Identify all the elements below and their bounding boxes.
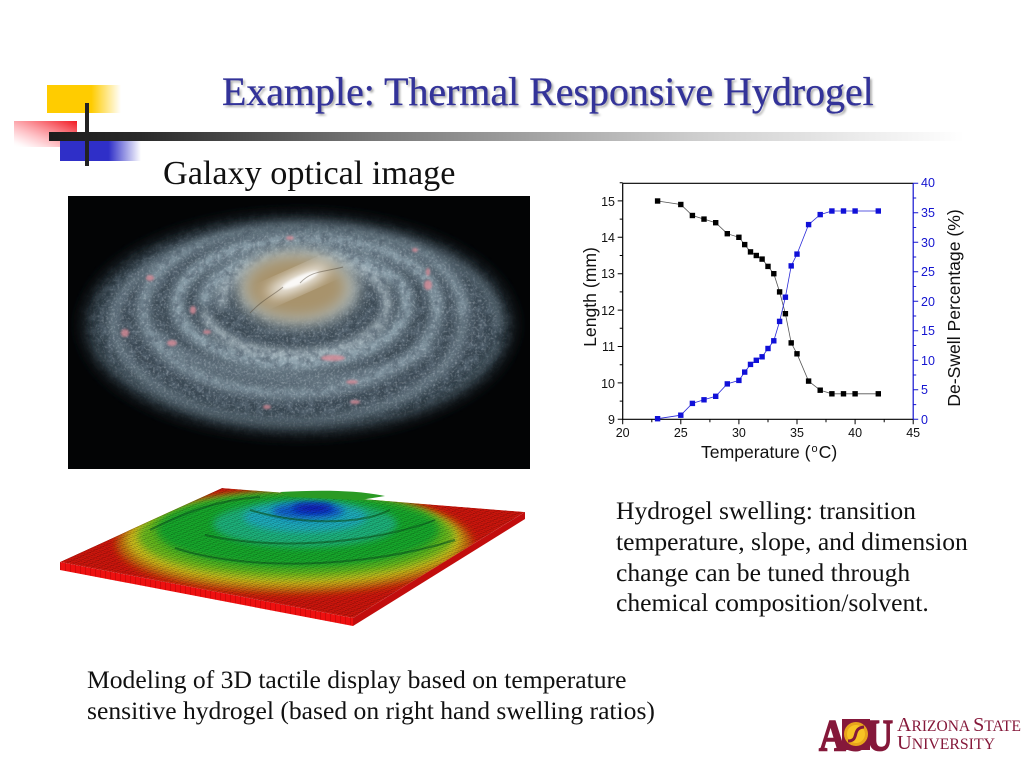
left tick labels: 11: [602, 340, 615, 354]
left tick labels: 13: [601, 267, 615, 281]
left tick labels: 14: [601, 231, 615, 245]
left tick labels: 10: [601, 377, 615, 391]
right tick labels: 0: [921, 413, 928, 427]
right tick labels: 15: [921, 324, 935, 338]
3D mesh model of tactile display: [60, 488, 525, 626]
bottom tick labels: 30: [732, 426, 746, 440]
x axis label: temperature: Temperature (: [701, 442, 811, 462]
right tick labels: [921, 176, 935, 427]
right tick labels: 35: [921, 206, 935, 220]
left tick labels: 15: [601, 195, 615, 209]
text: modeling caption: Modeling of 3D tactile display based on temperature: [87, 665, 626, 694]
heading: galaxy optical image: Galaxy optical image: [163, 155, 455, 192]
y axis label: length: Length (mm): [580, 247, 600, 347]
bottom tick labels: 35: [790, 426, 804, 440]
x axis label: temperature: C): [819, 442, 837, 462]
text: hydrogel swelling note: Hydrogel swelling: transition: [616, 496, 916, 525]
right tick labels: 40: [921, 176, 935, 190]
plate front edges: [60, 512, 525, 626]
bottom tick labels: 20: [616, 426, 630, 440]
text: modeling caption: sensitive hydrogel (based on right hand swelling ratios): [87, 696, 655, 725]
x axis label: temperature: o: [812, 443, 818, 455]
logo: Arizona State University: UNIVERSITY: [897, 732, 995, 754]
text: modeling caption: [87, 665, 655, 725]
bottom tick labels: 45: [906, 426, 920, 440]
star-forming regions: [121, 236, 432, 409]
decorative logo: coloured blocks and bars: [14, 85, 920, 166]
bottom tick labels: 25: [674, 426, 688, 440]
bottom tick labels: [616, 426, 920, 440]
right tick labels: 20: [921, 295, 935, 309]
left tick labels: [601, 195, 615, 427]
length series: [658, 201, 878, 394]
plate top surface with contour colours: [60, 488, 525, 618]
left and bottom axes: [618, 183, 913, 424]
raised surface bulge: [280, 491, 385, 500]
text: hydrogel swelling note: temperature, slope, and dimension: [616, 527, 968, 556]
right tick labels: 25: [921, 265, 935, 279]
right tick labels: 5: [921, 383, 928, 397]
chart: length and de-swell vs temperature: [580, 176, 964, 462]
logo sun: [842, 719, 870, 750]
text: hydrogel swelling note: change can be tuned through: [616, 558, 910, 587]
right axis: [913, 183, 918, 419]
text: hydrogel swelling note: [616, 496, 968, 617]
galaxy image: [68, 196, 530, 469]
de-swell series: [658, 211, 878, 419]
galaxy bulge: [236, 250, 360, 326]
logo: Arizona State University: ASU: [819, 711, 893, 760]
y axis label: de-swell percentage: De-Swell Percentage (%): [944, 209, 964, 407]
left tick labels: 9: [608, 413, 615, 427]
text: hydrogel swelling note: chemical composition/solvent.: [616, 588, 929, 617]
logo: Arizona State University: [818, 711, 1021, 760]
bottom tick labels: 40: [848, 426, 862, 440]
left tick labels: 12: [601, 304, 615, 318]
logo: Arizona State University: ARIZONA STATE: [897, 714, 1021, 736]
right tick labels: 10: [921, 354, 935, 368]
right tick labels: 30: [921, 236, 935, 250]
title: Example: Thermal Responsive Hydrogel: [222, 69, 874, 114]
